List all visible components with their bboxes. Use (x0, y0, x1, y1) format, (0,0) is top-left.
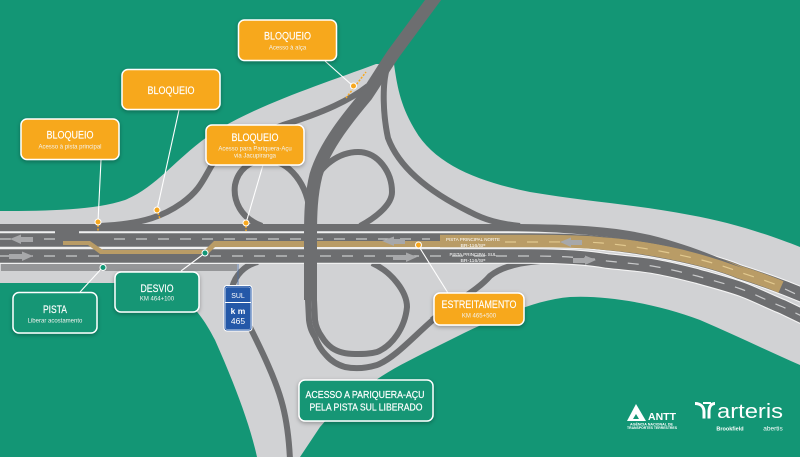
callout: estreitamento: KM 465+500 (462, 314, 497, 320)
logo: ANTT: AGÊNCIA NACIONAL DE (630, 422, 674, 426)
logo: arteris: abertis (763, 426, 784, 432)
callout: bloqueio pariquera-açu (206, 125, 304, 165)
logo: arteris: Brookfield (716, 426, 744, 432)
acostamento strip (1, 264, 237, 271)
callout: bloqueio pariquera-açu: Acesso para Pariquera-Açu (218, 146, 292, 152)
callout: desvio: DESVIO (140, 283, 174, 295)
km sign: SUL (231, 293, 245, 300)
callout: estreitamento (434, 293, 524, 325)
ramp: lower right (432, 261, 540, 320)
logo: ANTT: ANTT (648, 412, 676, 423)
ramp: trunk road (310, 0, 436, 300)
road labels (446, 237, 500, 264)
callout: bloqueio acesso à alça: BLOQUEIO (264, 30, 311, 42)
arrow: south right 3 (573, 256, 596, 265)
callout: bloqueio pista principal: BLOQUEIO (46, 130, 94, 142)
edge line gap (55, 231, 79, 234)
logo: ANTT: TRANSPORTES TERRESTRES (627, 426, 678, 430)
tan narrowing (63, 241, 445, 254)
logo: arteris: arteris (717, 401, 783, 423)
logo: ANTT (627, 404, 678, 430)
callout: desvio: KM 464+100 (140, 296, 175, 302)
callout: bloqueio pariquera-açu: BLOQUEIO (232, 132, 279, 144)
lane dashes (0, 238, 430, 240)
callout: bloqueio acesso à alça: Acesso à alça (269, 46, 307, 52)
ramp: upper right (384, 68, 520, 226)
callout: bloqueio (122, 70, 220, 110)
leader lines (80, 61, 448, 293)
callout: desvio (115, 272, 199, 312)
north carriageway (0, 240, 800, 298)
callout: bloqueio: BLOQUEIO (148, 85, 195, 97)
road labels: BR-116/SP (460, 258, 486, 264)
ramp: right loop (313, 152, 392, 226)
arrow: north left 1 (10, 234, 33, 244)
callout: pista: Liberar acostamento (28, 318, 83, 324)
arrow: south right 2 (393, 252, 417, 262)
callout: bloqueio pariquera-açu: via Jacupiranga (234, 154, 277, 160)
road labels: PISTA PRINCIPAL SUL (450, 252, 497, 258)
km sign: 465 (231, 316, 245, 326)
km sign: k m (231, 306, 246, 316)
ramp: lower left (232, 262, 290, 457)
north edge lines (0, 240, 800, 298)
callout: pista (13, 292, 97, 333)
ramp: trunk inner lane (314, 263, 407, 354)
callout: acesso liberado (299, 380, 433, 421)
km sign (224, 286, 252, 331)
road labels: PISTA PRINCIPAL NORTE (446, 237, 500, 243)
callout: bloqueio pista principal: Acesso à pista principal (38, 144, 102, 150)
callout: acesso liberado: PELA PISTA SUL LIBERADO (310, 402, 422, 414)
arrow: north left 2 (382, 236, 405, 246)
arrow: north left 3 (560, 238, 582, 247)
sign post (237, 264, 239, 286)
block dashes (98, 72, 366, 231)
callout: bloqueio acesso à alça (238, 20, 336, 60)
south edge lines (0, 256, 800, 320)
ramp: left loop (235, 160, 310, 226)
road labels: BR-116/SP (460, 243, 486, 249)
south carriageway (0, 256, 800, 320)
arrow: south right 1 (9, 252, 33, 261)
collector curve (500, 224, 745, 269)
top collector straight (0, 224, 505, 231)
callout: estreitamento: ESTREITAMENTO (442, 299, 517, 311)
logo: arteris (695, 401, 784, 432)
marker dots (95, 83, 422, 270)
tan lane (440, 241, 781, 287)
callout: bloqueio pista principal (21, 119, 119, 160)
ramp: trunk outer lane (307, 270, 434, 368)
ramp: upper left (100, 86, 368, 226)
callout: acesso liberado: ACESSO A PARIQUERA-AÇU (306, 389, 424, 401)
callout: pista: PISTA (43, 304, 68, 316)
